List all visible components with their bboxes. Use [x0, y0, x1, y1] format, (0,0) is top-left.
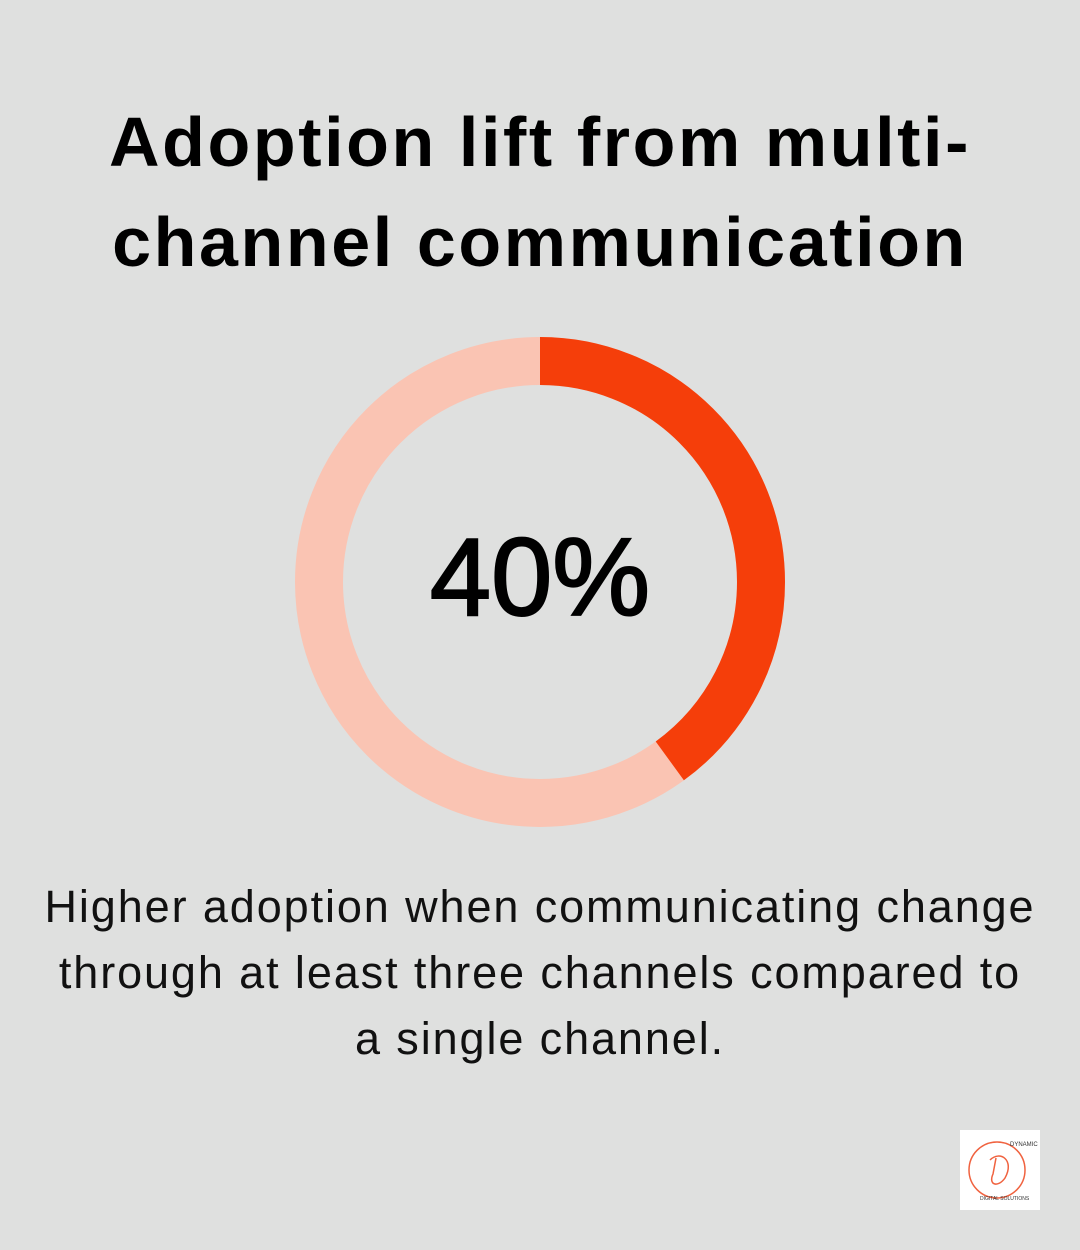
logo: DIGITAL SOLUTIONS: [980, 1196, 1030, 1202]
caption: [44, 881, 1035, 1064]
logo: [960, 1130, 1040, 1210]
logo: DYNAMIC: [1010, 1142, 1038, 1148]
title: Adoption lift from multi-: [109, 103, 971, 181]
donut chart: 40%: [430, 516, 650, 639]
caption: a single channel.: [355, 1013, 725, 1064]
caption: Higher adoption when communicating change: [44, 881, 1035, 932]
title: [109, 103, 971, 281]
title: channel communication: [112, 203, 968, 281]
caption: through at least three channels compared to: [59, 947, 1021, 998]
